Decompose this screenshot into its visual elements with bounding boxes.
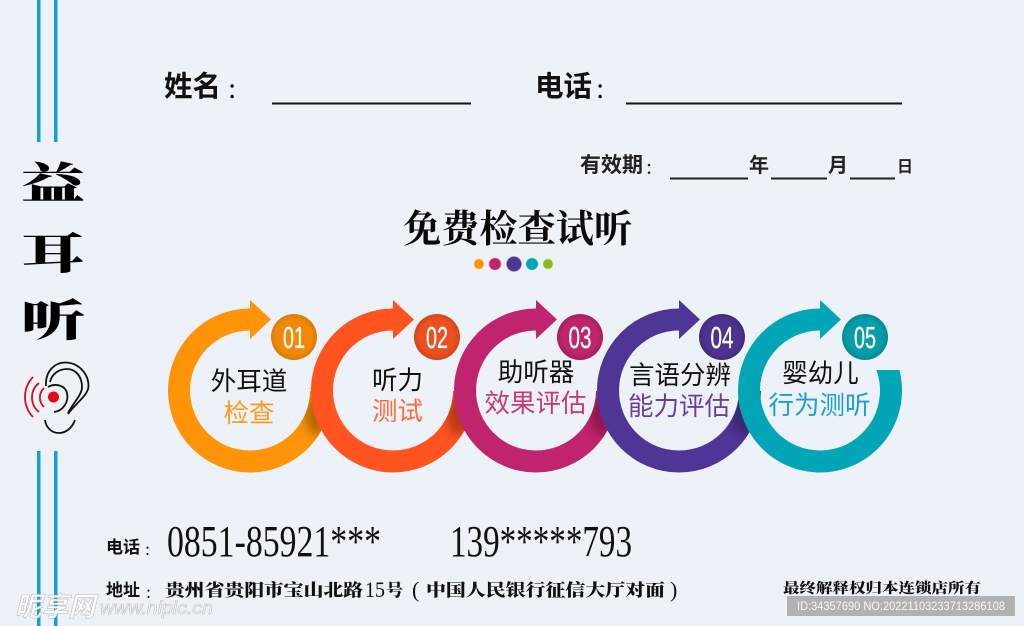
- step 1: arrow ring: [168, 300, 332, 472]
- name field: :: [228, 72, 236, 105]
- left blue double line, bottom: [37, 451, 58, 626]
- contact phone numbers: 电话: [106, 533, 140, 558]
- watermark: site logo: [15, 592, 213, 622]
- contact phone numbers: 0851-85921***: [167, 517, 381, 566]
- validity date field: 有效期: [580, 149, 643, 179]
- address: 15: [365, 577, 385, 602]
- phone field: :: [596, 72, 604, 105]
- watermark: ID box: ID:34357690 NO:20221103233713286108: [797, 601, 1005, 613]
- validity date field: 月: [828, 149, 848, 178]
- brand name: 耳: [21, 230, 85, 279]
- title: 免费检查试听: [403, 208, 632, 251]
- validity date field: :: [646, 154, 652, 179]
- badge 05: [842, 314, 888, 360]
- badge 01: [271, 314, 317, 360]
- icon: ear with sound waves: [25, 362, 89, 433]
- badge 01: 01: [283, 320, 305, 355]
- address: 贵州省贵阳市宝山北路: [165, 580, 363, 600]
- step 4 label: 能力评估: [628, 393, 730, 421]
- phone field: 电话: [535, 64, 592, 105]
- address: 地址: [106, 576, 140, 601]
- address: :: [146, 582, 151, 602]
- step 5: arrow ring: [738, 300, 902, 473]
- contact phone numbers: [106, 517, 632, 566]
- step 5 label: 婴幼儿: [782, 360, 859, 388]
- address: 号: [386, 580, 403, 600]
- badge 03: 03: [568, 320, 592, 355]
- step 3: arrow ring: [454, 300, 618, 472]
- badge 04: 04: [710, 320, 734, 355]
- validity date field: [580, 149, 913, 180]
- address: ): [670, 577, 677, 602]
- step 2 label: 听力: [372, 367, 423, 395]
- contact phone numbers: :: [145, 539, 150, 559]
- brand name: 益: [21, 160, 86, 209]
- left blue double line, top: [37, 0, 58, 142]
- watermark: site logo: www.nipic.cn: [100, 598, 213, 618]
- step 1 label: 检查: [223, 400, 275, 428]
- brand name: [21, 160, 86, 346]
- brand name: 听: [21, 297, 85, 346]
- step 4 label: [628, 362, 731, 421]
- step 5 label: 行为测听: [768, 392, 871, 420]
- badge 03: [557, 314, 603, 360]
- phone field: [535, 64, 902, 105]
- decorative colored dots: [474, 256, 554, 272]
- watermark: ID box: [787, 596, 1015, 616]
- step 2 label: [372, 367, 423, 426]
- step 3 label: [484, 359, 587, 418]
- validity date field: 年: [749, 149, 769, 178]
- validity date field: 日: [897, 153, 913, 177]
- step 3 label: 助听器: [498, 359, 574, 387]
- address: [106, 576, 677, 602]
- step 1 label: 外耳道: [211, 368, 287, 396]
- watermark: site logo: 昵享网: [15, 592, 99, 622]
- badge 05: 05: [854, 320, 876, 355]
- address: 中国人民银行征信大厅对面: [426, 580, 665, 600]
- step 4 label: 言语分辨: [629, 362, 731, 390]
- badge 02: 02: [426, 320, 448, 355]
- contact phone numbers: 139*****793: [450, 517, 632, 566]
- name field: [164, 64, 471, 105]
- address: (: [412, 577, 419, 602]
- badge 02: [414, 314, 460, 360]
- step 2: arrow ring: [311, 300, 475, 472]
- step 4: arrow ring: [597, 300, 761, 472]
- rights notice: 最终解释权归本连锁店所有: [783, 580, 981, 597]
- badge 04: [699, 314, 745, 360]
- step 3 label: 效果评估: [484, 390, 587, 418]
- step 2 label: 测试: [372, 398, 423, 426]
- name field: 姓名: [164, 64, 221, 105]
- step 1 label: [211, 368, 287, 428]
- step 5 label: [768, 360, 871, 420]
